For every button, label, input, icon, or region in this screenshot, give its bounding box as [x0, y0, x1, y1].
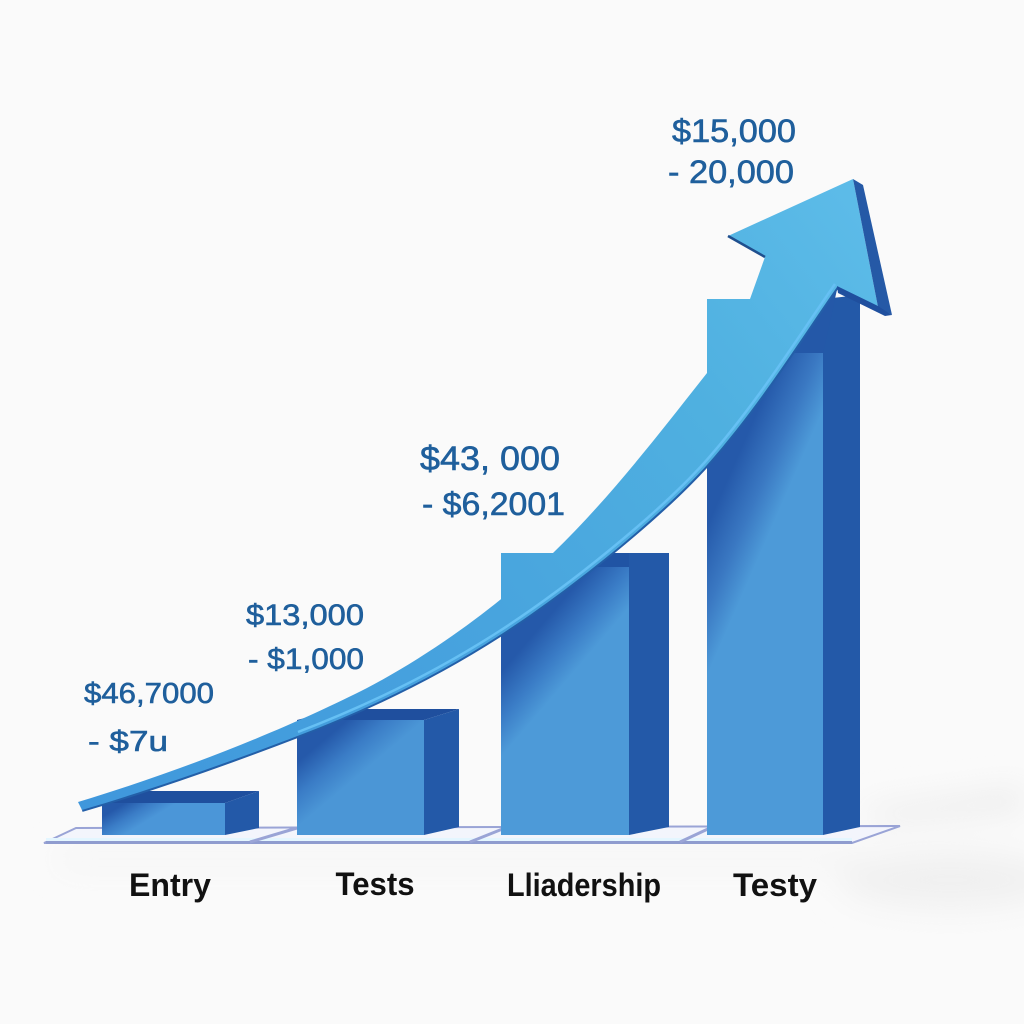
background shadow: [60, 790, 1024, 908]
chart floor grid: [44, 826, 900, 844]
category labels: Entry: [129, 867, 211, 903]
bar: Tests: [297, 709, 459, 835]
label: leadership salary: [420, 440, 565, 522]
category labels: Testy: [733, 867, 817, 903]
category labels: Tests: [336, 866, 414, 902]
label: top salary: $15,000: [672, 113, 796, 149]
label: entry salary: $46,7000: [84, 678, 214, 710]
label: tests salary: - $1,000: [248, 643, 364, 676]
label: entry salary: [84, 678, 214, 758]
bar: Testy: [707, 285, 860, 835]
label: top salary: [668, 113, 796, 190]
label: tests salary: [246, 599, 364, 676]
bar: Leadership: [501, 553, 669, 835]
label: tests salary: $13,000: [246, 599, 364, 632]
label: top salary: - 20,000: [668, 154, 794, 190]
label: entry salary: - $7u: [88, 726, 168, 758]
label: leadership salary: - $6,2001: [422, 486, 565, 522]
category labels: [129, 866, 817, 903]
growth arrow: [78, 179, 892, 810]
label: leadership salary: $43, 000: [420, 440, 560, 478]
bar: Entry: [102, 791, 259, 835]
category labels: Lliadership: [507, 867, 661, 903]
